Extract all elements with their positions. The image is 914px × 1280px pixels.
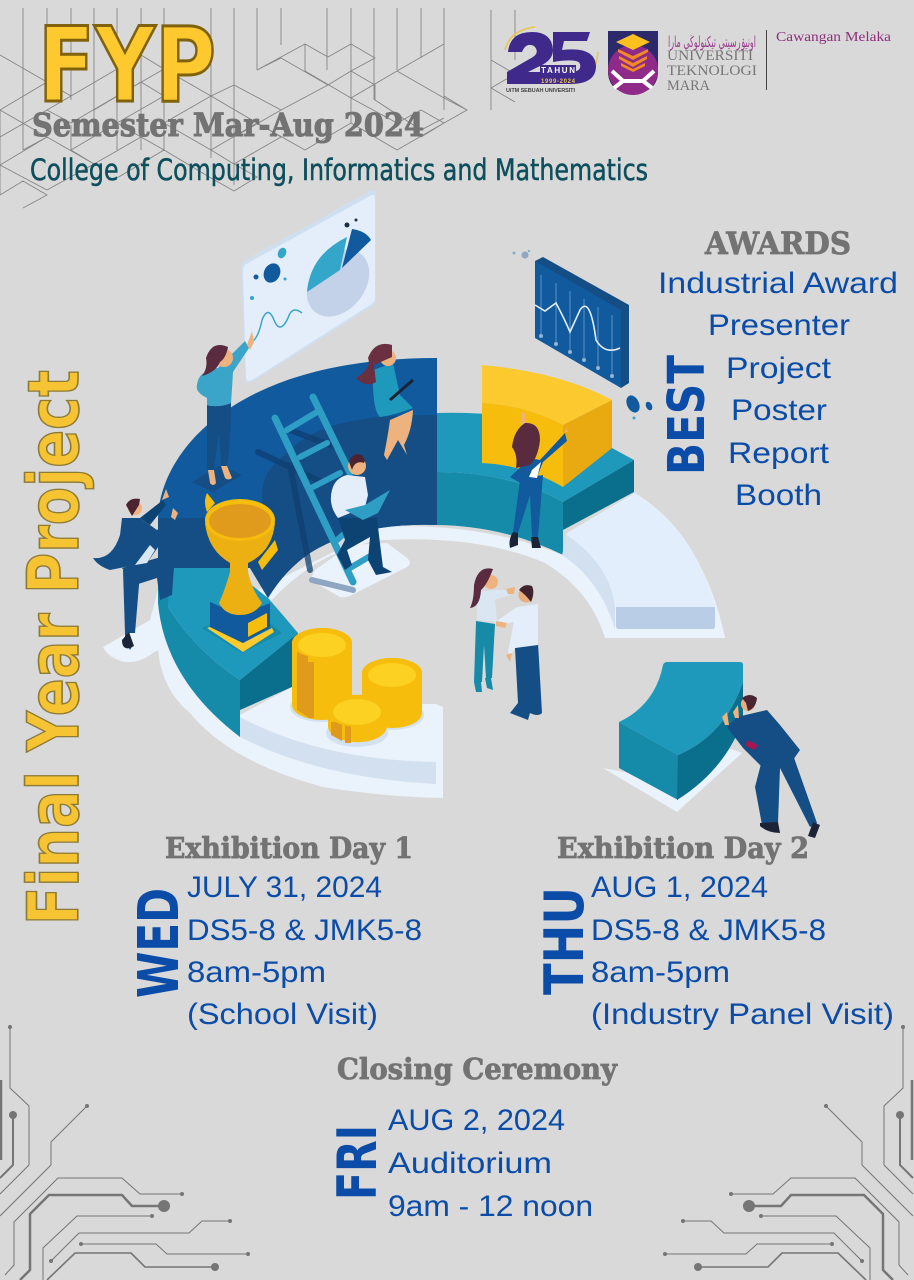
logo: 25 years: 1999-2024 <box>541 79 576 85</box>
icon: coins <box>290 628 424 747</box>
list: award categories: Industrial Award <box>658 267 898 300</box>
list: award categories: Report <box>728 437 830 470</box>
icon: ladder <box>258 397 372 590</box>
day 2 details: AUG 1, 2024 <box>591 871 768 904</box>
list: award categories: Project <box>726 352 832 385</box>
logo: university name: TEKNOLOGI <box>667 63 757 79</box>
logo: 25 years: UiTM SEBUAH UNIVERSITI <box>506 88 575 94</box>
icon: monitor chart <box>535 257 629 388</box>
illustration: isometric pie chart <box>93 190 820 838</box>
white bottom segment <box>240 687 443 795</box>
day 2 label: THU: THU <box>533 887 596 995</box>
day 1 details: 8am-5pm <box>187 956 326 989</box>
person: woman at yellow block <box>509 412 568 548</box>
day 1 details: (School Visit) <box>187 998 378 1031</box>
logo: 25 years <box>505 27 598 94</box>
ring segment: teal left <box>168 568 298 680</box>
heading: awards: AWARDS <box>704 226 851 262</box>
title: FYP: FYP <box>38 6 216 126</box>
day 2 details: DS5-8 & JMK5-8 <box>591 914 826 947</box>
person: woman seated with tablet <box>356 344 413 460</box>
person: man climbing <box>93 489 178 650</box>
day 2 details: 8am-5pm <box>591 956 730 989</box>
day 1 details: DS5-8 & JMK5-8 <box>187 914 422 947</box>
white inner band <box>258 493 725 638</box>
loose teal block <box>603 745 742 812</box>
subtitle: semester: Semester Mar-Aug 2024 <box>32 106 424 144</box>
heading: exhibition day 2: Exhibition Day 2 <box>557 831 809 865</box>
person: woman talking <box>470 568 515 692</box>
list: award categories: Presenter <box>708 309 850 342</box>
logo: university name: MARA <box>667 78 710 94</box>
person: man pushing block <box>722 695 820 838</box>
heading: exhibition day 1: Exhibition Day 1 <box>165 831 413 865</box>
day 2 details <box>591 871 894 1031</box>
logo: 25 years: TAHUN <box>541 66 575 75</box>
white base under man on ladder <box>310 543 410 597</box>
day 1 details: JULY 31, 2024 <box>187 871 382 904</box>
closing details <box>388 1104 593 1223</box>
label: BEST: BEST <box>658 355 717 475</box>
closing details: Auditorium <box>388 1147 552 1180</box>
person: man with laptop <box>331 454 392 575</box>
ring segment: navy <box>158 358 437 598</box>
ring segment: teal right <box>437 413 634 502</box>
yellow block <box>482 365 612 425</box>
person: man talking <box>495 585 542 720</box>
decorative dots near monitor <box>512 250 654 420</box>
day 2 details: (Industry Panel Visit) <box>591 998 894 1031</box>
list: award categories: Poster <box>731 394 827 427</box>
white right segment <box>567 493 715 607</box>
person: woman pointing <box>192 331 254 492</box>
logo: university name: UNIVERSITI <box>667 48 753 64</box>
white base left and bottom <box>103 590 443 798</box>
logo: UiTM shield <box>608 31 658 95</box>
logo: campus name: Cawangan Melaka <box>776 29 891 44</box>
day 1 details <box>187 871 422 1031</box>
list: award categories: Booth <box>735 479 822 512</box>
logo: university name: اونيۏرسيتي تيكنولوڬي مارا <box>668 33 756 52</box>
day 1 label: WED: WED <box>127 888 192 998</box>
subtitle: college: College of Computing, Informatics and Mathematics <box>30 153 648 187</box>
icon: trophy <box>202 493 282 653</box>
heading: closing ceremony: Closing Ceremony <box>337 1052 618 1086</box>
closing label: FRI: FRI <box>326 1125 389 1200</box>
list: award categories <box>658 267 898 512</box>
closing details: AUG 2, 2024 <box>388 1104 565 1137</box>
vertical title: Final Year Project: Final Year Project <box>13 370 95 925</box>
icon: chart board <box>241 190 382 383</box>
closing details: 9am - 12 noon <box>388 1190 593 1223</box>
logo: university name <box>667 33 757 94</box>
